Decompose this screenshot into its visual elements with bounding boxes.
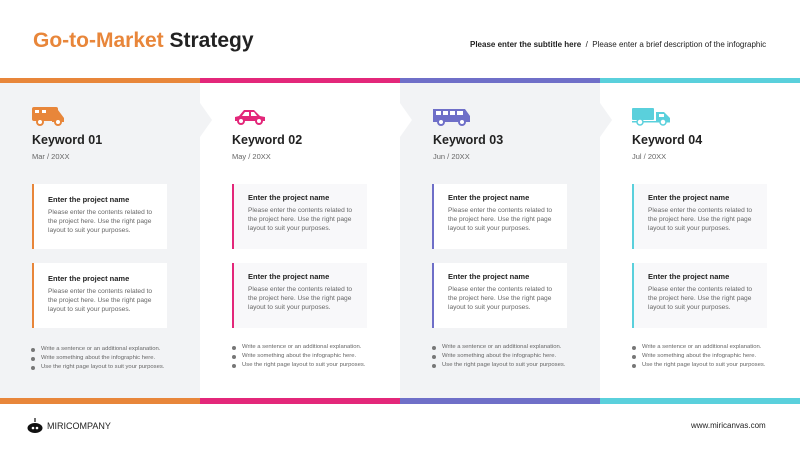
title: Go-to-Market Strategy	[33, 29, 254, 52]
icon: camper	[32, 107, 64, 126]
card 1: Please enter the contents related to the project here. Use the right page layout to suit your purposes.	[648, 207, 752, 232]
card 2	[232, 263, 367, 328]
bullets: Write something about the infographic here.	[242, 353, 356, 359]
panel: column 2	[232, 110, 365, 368]
card 1: Enter the project name	[48, 195, 129, 204]
bullets: Write something about the infographic here.	[642, 353, 756, 359]
bullets: Write a sentence or an additional explanation.	[242, 344, 361, 350]
card 1	[632, 184, 767, 249]
heading: Keyword 04	[632, 133, 702, 147]
card 2: Please enter the contents related to the project here. Use the right page layout to suit your purposes.	[448, 286, 552, 311]
bullets: Write something about the infographic here.	[442, 353, 556, 359]
card 2: Enter the project name	[648, 272, 729, 281]
card 1: Please enter the contents related to the project here. Use the right page layout to suit your purposes.	[448, 207, 552, 232]
heading: Keyword 03	[433, 133, 503, 147]
card 2: Enter the project name	[248, 272, 329, 281]
panel: column 1	[31, 107, 167, 370]
heading: Keyword 02	[232, 133, 302, 147]
bullets: Write something about the infographic here.	[41, 355, 155, 361]
card 2	[432, 263, 567, 328]
card 1: Enter the project name	[448, 193, 529, 202]
card 1	[232, 184, 367, 249]
card 2: Please enter the contents related to the project here. Use the right page layout to suit your purposes.	[48, 288, 152, 313]
subtitle: Please enter the subtitle here / Please enter a brief description of the infographic	[470, 40, 766, 49]
bullets: Use the right page layout to suit your purposes.	[442, 362, 565, 368]
card 2	[632, 263, 767, 328]
bullets: Use the right page layout to suit your purposes.	[41, 364, 164, 370]
panel: column 1: Mar / 20XX	[32, 152, 70, 161]
bullets	[232, 344, 365, 368]
bullets	[31, 346, 164, 370]
heading: Keyword 01	[32, 133, 102, 147]
icon: bus	[433, 109, 470, 126]
card 1	[432, 184, 567, 249]
card 2	[32, 263, 167, 328]
panel: column 3	[432, 109, 567, 368]
bullets	[632, 344, 765, 368]
card 2: Please enter the contents related to the project here. Use the right page layout to suit your purposes.	[248, 286, 352, 311]
bullets: Write a sentence or an additional explanation.	[442, 344, 561, 350]
card 1: Please enter the contents related to the project here. Use the right page layout to suit your purposes.	[248, 207, 352, 232]
website: www.miricanvas.com	[691, 421, 766, 430]
card 1: Enter the project name	[648, 193, 729, 202]
top color bar	[0, 78, 800, 83]
card 1	[32, 184, 167, 249]
bullets	[432, 344, 565, 368]
panel: column 4	[632, 108, 765, 368]
logo: MIRICOMPANY	[47, 421, 111, 431]
card 2: Enter the project name	[448, 272, 529, 281]
bullets: Write a sentence or an additional explanation.	[41, 346, 160, 352]
panel: column 2: May / 20XX	[232, 152, 271, 161]
bottom color bar	[0, 398, 800, 404]
card 1: Enter the project name	[248, 193, 329, 202]
panel: column 3: Jun / 20XX	[433, 152, 470, 161]
column backgrounds	[0, 83, 612, 398]
card 2: Enter the project name	[48, 274, 129, 283]
icon: car	[235, 110, 265, 125]
card 2: Please enter the contents related to the project here. Use the right page layout to suit your purposes.	[648, 286, 752, 311]
card 1: Please enter the contents related to the project here. Use the right page layout to suit your purposes.	[48, 209, 152, 234]
bullets: Write a sentence or an additional explanation.	[642, 344, 761, 350]
logo	[28, 418, 111, 433]
icon: truck	[632, 108, 670, 126]
bullets: Use the right page layout to suit your purposes.	[242, 362, 365, 368]
bullets: Use the right page layout to suit your purposes.	[642, 362, 765, 368]
panel: column 4: Jul / 20XX	[632, 152, 666, 161]
